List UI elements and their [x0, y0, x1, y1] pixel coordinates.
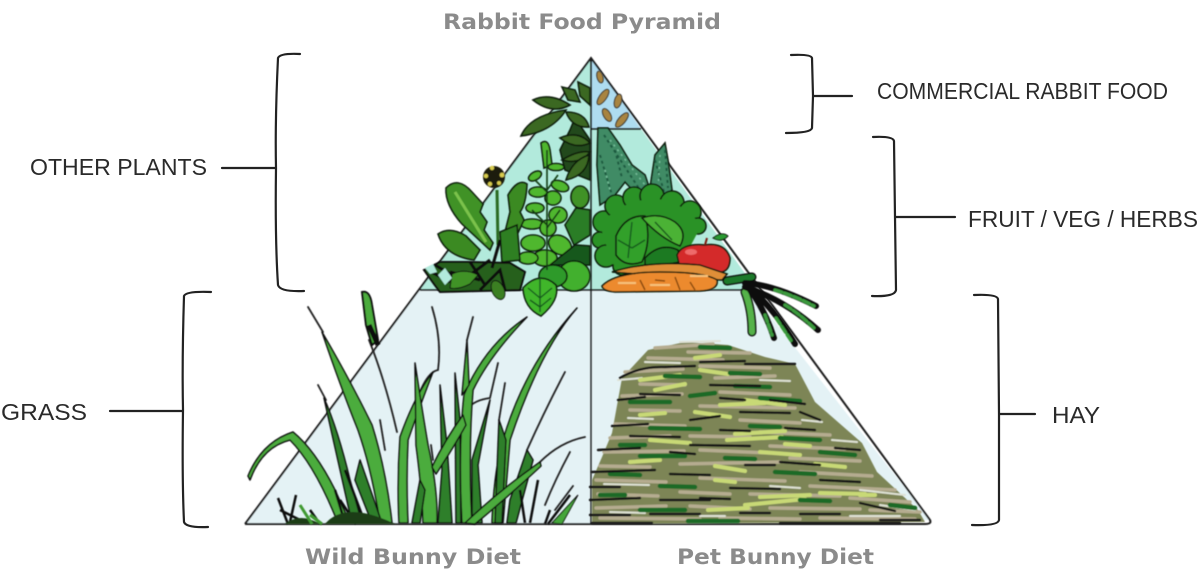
caption: pet bunny diet: Pet Bunny Diet: [677, 545, 874, 569]
bracket: commercial rabbit food: [786, 55, 852, 133]
tall blades: [322, 332, 392, 523]
pyramid: [245, 58, 930, 524]
fruit and vegetable section background: [591, 129, 757, 290]
icon: apple: [677, 234, 730, 272]
label: other plants: OTHER PLANTS: [30, 154, 207, 180]
label: grass: GRASS: [1, 399, 87, 425]
bracket: hay: [972, 295, 1035, 525]
tan straws: [596, 344, 920, 519]
thin grass stems: [308, 307, 585, 510]
bracket: other plants: [222, 54, 304, 291]
icon: dark upper leaves: [521, 82, 590, 180]
dandelion stem: [497, 190, 498, 245]
icon: grass: [248, 292, 585, 524]
icon: herb sprig: [518, 142, 590, 291]
icon: pellets: [595, 70, 630, 129]
dark green straws: [600, 347, 915, 521]
label: commercial rabbit food: COMMERCIAL RABBIT FOOD: [877, 78, 1168, 104]
plant and food drawings: [248, 70, 925, 524]
caption: wild bunny diet: Wild Bunny Diet: [305, 545, 521, 569]
drooping blade: [248, 432, 350, 523]
black straws: [590, 361, 920, 523]
grass section background: [245, 290, 591, 524]
label: hay: HAY: [1052, 402, 1100, 428]
icon: plant base tangle: [424, 240, 525, 302]
icon: big green leaf: [523, 278, 557, 316]
pale straws: [604, 341, 915, 516]
cattail head: [362, 292, 378, 345]
commercial food section background: [591, 58, 641, 129]
dandelion flower: [483, 166, 505, 188]
hay section background: [591, 290, 930, 524]
icon: kale: [597, 128, 672, 205]
pyramid outline: [245, 58, 930, 524]
icon: cabbage: [592, 184, 706, 275]
dandelion leaves: [446, 183, 493, 250]
base tufts: [278, 470, 570, 524]
icon: carrot: [602, 264, 727, 292]
icon: hay pile: [590, 341, 925, 524]
bracket: fruit veg herbs: [872, 137, 955, 296]
title: Rabbit Food Pyramid: [443, 10, 721, 34]
icon: carrot tops: [727, 277, 818, 344]
other plants section background: [420, 58, 591, 290]
icon: dandelion: [438, 166, 527, 262]
hay underlay: [592, 342, 925, 524]
bracket: grass: [110, 292, 211, 527]
label: fruit veg herbs: FRUIT / VEG / HERBS: [968, 206, 1198, 232]
yellow green straws: [630, 355, 875, 510]
